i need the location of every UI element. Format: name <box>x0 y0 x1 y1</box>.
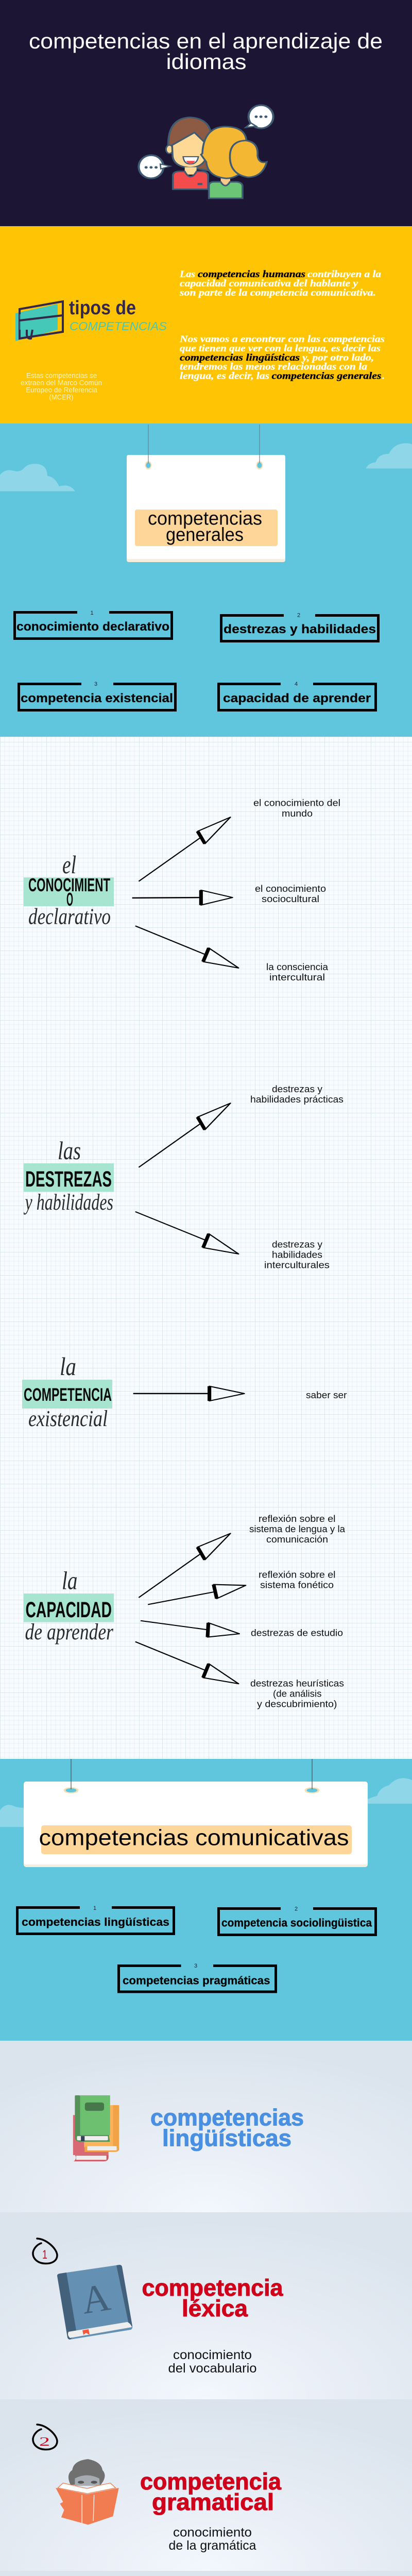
heading: competencias lingüísticas: competencias <box>150 2104 304 2131</box>
box 2: competencia sociolingüística: 2 <box>295 1906 298 1912</box>
icon: number 2: 2 <box>39 2435 50 2449</box>
box 2: destrezas y habilidades: 2 <box>297 612 300 618</box>
text block: marco común europeo: Europeo de Referencia <box>26 386 97 394</box>
box 2: competencia sociolingüística: competencia sociolingüistica <box>221 1917 372 1929</box>
section: destrezas y habilidades <box>24 1084 344 1270</box>
text block: vocabulario: conocimiento <box>173 2348 252 2362</box>
labels: capacidad: destrezas heurísticas <box>250 1679 344 1689</box>
icon: number 1: 1 <box>42 2248 47 2262</box>
hanging sign: competencias generales <box>127 425 285 562</box>
heading: competencia léxica <box>142 2275 283 2321</box>
labels: capacidad: comunicación <box>266 1534 328 1545</box>
text block: competencias humanas: Las <box>179 269 195 280</box>
labels: conocimiento declarativo: el conocimiento del <box>253 798 340 808</box>
labels: capacidad: reflexión sobre el <box>259 1514 336 1524</box>
section: conocimiento declarativo: CONOCIMIENT <box>28 874 110 895</box>
section: capacidad de aprender: de aprender <box>25 1619 114 1645</box>
box 3: competencias pragmáticas: competencias pragmáticas <box>123 1974 270 1987</box>
section: competencia existencial: existencial <box>28 1406 108 1431</box>
labels: destrezas <box>250 1084 344 1270</box>
panel: grid paper detail <box>0 737 412 1759</box>
heading: tipos de competencias: tipos de <box>69 297 136 319</box>
hanging sign: competencias comunicativas <box>24 1759 368 1867</box>
box 1: competencias lingüísticas: competencias lingüísticas <box>22 1916 169 1928</box>
panel: competencias lingüísticas <box>0 2041 412 2212</box>
panel: title header <box>0 0 412 226</box>
title <box>29 29 383 74</box>
text block: marco común europeo: Estas competencias se <box>26 372 97 379</box>
icon: clouds <box>0 1778 412 1827</box>
section: competencia existencial: COMPETENCIA <box>24 1385 112 1405</box>
labels: destrezas: interculturales <box>264 1260 330 1270</box>
heading: tipos de competencias <box>69 297 167 333</box>
icon: person reading book <box>56 2459 119 2524</box>
box 1: conocimiento declarativo: 1 <box>91 610 94 616</box>
labels: destrezas: habilidades <box>272 1250 322 1260</box>
box 4: capacidad de aprender: 4 <box>295 681 298 687</box>
text block: lingüísticas y generales: competencias generales <box>272 371 381 381</box>
heading: competencia gramatical <box>140 2468 282 2515</box>
section: destrezas y habilidades: DESTREZAS <box>25 1167 112 1192</box>
title: idiomas <box>166 49 246 74</box>
text block: vocabulario <box>168 2348 256 2376</box>
box 2: destrezas y habilidades: destrezas y habilidades <box>224 622 376 636</box>
icon: number 2 <box>33 2425 57 2450</box>
text block: marco común europeo: (MCER) <box>49 394 73 401</box>
labels: conocimiento declarativo <box>253 798 340 982</box>
box 2: destrezas y habilidades <box>221 612 378 641</box>
icon: dictionary book: A <box>79 2275 113 2323</box>
text block: competencias humanas <box>179 269 381 298</box>
labels: conocimiento declarativo: el conocimiento <box>255 884 326 894</box>
section: conocimiento declarativo: O <box>66 889 73 910</box>
labels: destrezas: habilidades prácticas <box>250 1094 344 1105</box>
text block: competencias humanas: capacidad comunicativa del hablante y <box>180 279 358 289</box>
section: conocimiento declarativo <box>24 798 340 982</box>
panel: competencia semántica <box>0 2571 412 2576</box>
panel: tipos de competencias <box>0 226 412 423</box>
box 3: competencias pragmáticas <box>118 1963 276 1992</box>
title: competencias en el aprendizaje de <box>29 29 383 53</box>
text block: lingüísticas y generales <box>179 334 385 381</box>
icon: clouds <box>0 443 412 491</box>
box 3: competencia existencial: competencia existencial <box>21 691 173 705</box>
text block: lingüísticas y generales: competencias lingüísticas <box>180 353 300 363</box>
arrows: capacidad <box>139 1533 246 1637</box>
box 1: competencias lingüísticas <box>18 1905 174 1934</box>
heading: competencia gramatical: gramatical <box>152 2489 274 2515</box>
section: capacidad de aprender: CAPACIDAD <box>26 1598 112 1622</box>
labels: capacidad: destrezas de estudio <box>251 1628 343 1638</box>
labels: capacidad <box>249 1514 346 1709</box>
panel: competencias comunicativas <box>0 1759 412 2041</box>
hanging sign: competencias comunicativas: competencias comunicativas <box>39 1825 349 1851</box>
text block: marco común europeo: extraen del Marco Común <box>21 379 102 386</box>
hanging sign: competencias generales: competencias <box>148 508 262 529</box>
heading: competencia léxica: léxica <box>182 2295 248 2321</box>
hanging sign: competencias generales: generales <box>166 524 244 545</box>
arrows: conocimiento declarativo <box>132 817 238 968</box>
icon: number 1 <box>33 2239 57 2264</box>
panel: competencias generales <box>0 423 412 737</box>
labels: capacidad: y descubrimiento) <box>257 1699 337 1709</box>
labels: destrezas: destrezas y <box>272 1240 322 1250</box>
arrows: destrezas <box>135 1103 238 1254</box>
section: destrezas y habilidades: y habilidades <box>24 1190 113 1215</box>
text block: competencias humanas: contribuyen a la <box>307 269 381 280</box>
section: conocimiento declarativo: el <box>62 850 76 879</box>
box 1: conocimiento declarativo <box>14 610 172 639</box>
panel: competencia gramatical <box>0 2399 412 2571</box>
text block: lingüísticas y generales: . <box>382 371 385 381</box>
text block: lingüísticas y generales: tendremos las menos relacionadas con la <box>180 362 367 372</box>
heading: competencia gramatical: competencia <box>140 2468 282 2495</box>
text block: gramática: conocimiento <box>173 2526 252 2540</box>
box 4: capacidad de aprender: capacidad de aprender <box>223 691 371 705</box>
arrow: saber ser <box>133 1386 244 1401</box>
labels: conocimiento declarativo: la consciencia <box>266 962 329 972</box>
arrow: destrezas heurísticas <box>135 1642 238 1684</box>
box 1: competencias lingüísticas: 1 <box>93 1905 96 1911</box>
labels: conocimiento declarativo: mundo <box>282 808 313 819</box>
box 4: capacidad de aprender <box>218 681 376 710</box>
labels: destrezas: destrezas y <box>272 1084 322 1094</box>
text block: lingüísticas y generales: y, por otro lado, <box>301 353 374 363</box>
label: saber ser: saber ser <box>306 1390 347 1400</box>
box 1: conocimiento declarativo: conocimiento declarativo <box>16 620 169 634</box>
labels: capacidad: sistema fonético <box>260 1580 334 1590</box>
heading: competencias lingüísticas: lingüísticas <box>162 2125 291 2151</box>
box 3: competencia existencial: 3 <box>94 681 97 687</box>
text block: competencias humanas: son parte de la competencia comunicativa. <box>179 288 376 298</box>
section: capacidad de aprender: la <box>62 1566 77 1595</box>
text block: gramática: de la gramática <box>169 2538 256 2553</box>
text block: lingüísticas y generales: que tienen que ver con la lengua, es decir las <box>180 344 381 354</box>
section: capacidad de aprender <box>24 1514 346 1709</box>
section: conocimiento declarativo: declarativo <box>28 904 111 929</box>
section: destrezas y habilidades: las <box>58 1136 81 1165</box>
labels: conocimiento declarativo: sociocultural <box>262 894 319 904</box>
text block: competencias humanas: competencias humanas <box>198 269 305 280</box>
icon: dictionary book <box>57 2265 132 2340</box>
box 2: competencia sociolingüística <box>218 1906 376 1935</box>
heading: competencia léxica: competencia <box>142 2275 283 2301</box>
heading: competencias lingüísticas <box>150 2104 304 2151</box>
text block: lingüísticas y generales: Nos vamos a encontrar con las competencias <box>179 334 385 345</box>
labels: capacidad: (de análisis <box>273 1689 321 1699</box>
text block: gramática <box>169 2526 256 2553</box>
panel: competencia léxica <box>0 2212 412 2399</box>
section: competencia existencial <box>22 1352 347 1431</box>
section: competencia existencial: la <box>60 1352 76 1381</box>
icon: megaphone <box>15 301 63 341</box>
icon: two women talking <box>139 105 273 198</box>
text block: vocabulario: del vocabulario <box>168 2361 256 2376</box>
labels: capacidad: reflexión sobre el <box>259 1569 336 1580</box>
text block: lingüísticas y generales: lengua, es decir, las <box>180 371 269 381</box>
box 3: competencia existencial <box>19 681 175 710</box>
text block: marco común europeo <box>21 372 102 401</box>
box 3: competencias pragmáticas: 3 <box>194 1963 197 1969</box>
labels: capacidad: sistema de lengua y la <box>249 1524 346 1534</box>
heading: tipos de competencias: COMPETENCIAS <box>70 319 167 333</box>
icon: stack of books <box>73 2095 119 2161</box>
labels: conocimiento declarativo: intercultural <box>269 972 325 982</box>
